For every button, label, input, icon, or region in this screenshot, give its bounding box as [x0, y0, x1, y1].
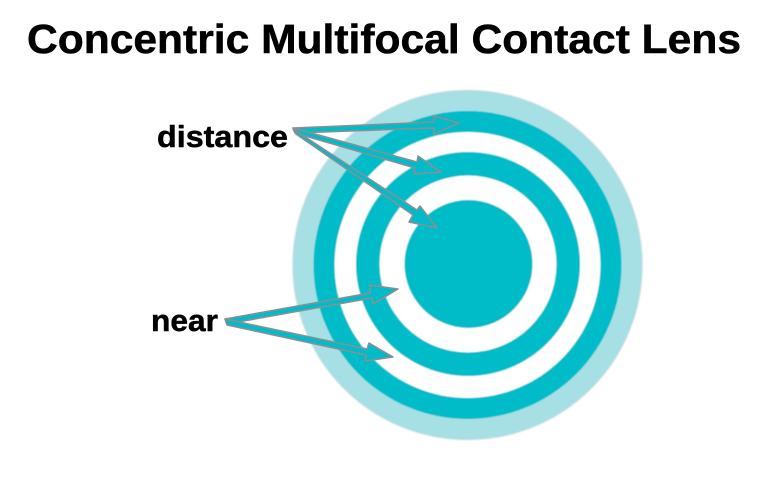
arrow: near to inner ring — [225, 285, 398, 324]
outer lens edge — [292, 90, 642, 440]
arrow: distance to middle ring — [293, 128, 441, 174]
label: distance: distance — [157, 119, 288, 154]
distance ring: outer — [314, 111, 622, 419]
distance centre zone — [404, 200, 532, 328]
arrows from distance label — [293, 116, 459, 228]
label: near: near — [151, 303, 218, 338]
arrows from near label — [225, 285, 398, 361]
arrow: distance to centre — [293, 129, 437, 228]
arrow: near to outer ring — [225, 319, 393, 361]
arrow: distance to outer ring — [293, 116, 459, 134]
near ring: outer — [334, 132, 600, 398]
concentric contact lens diagram — [292, 90, 642, 440]
near ring: inner — [380, 176, 556, 352]
title: Concentric Multifocal Contact Lens — [27, 16, 741, 62]
distance ring: inner — [356, 152, 580, 376]
